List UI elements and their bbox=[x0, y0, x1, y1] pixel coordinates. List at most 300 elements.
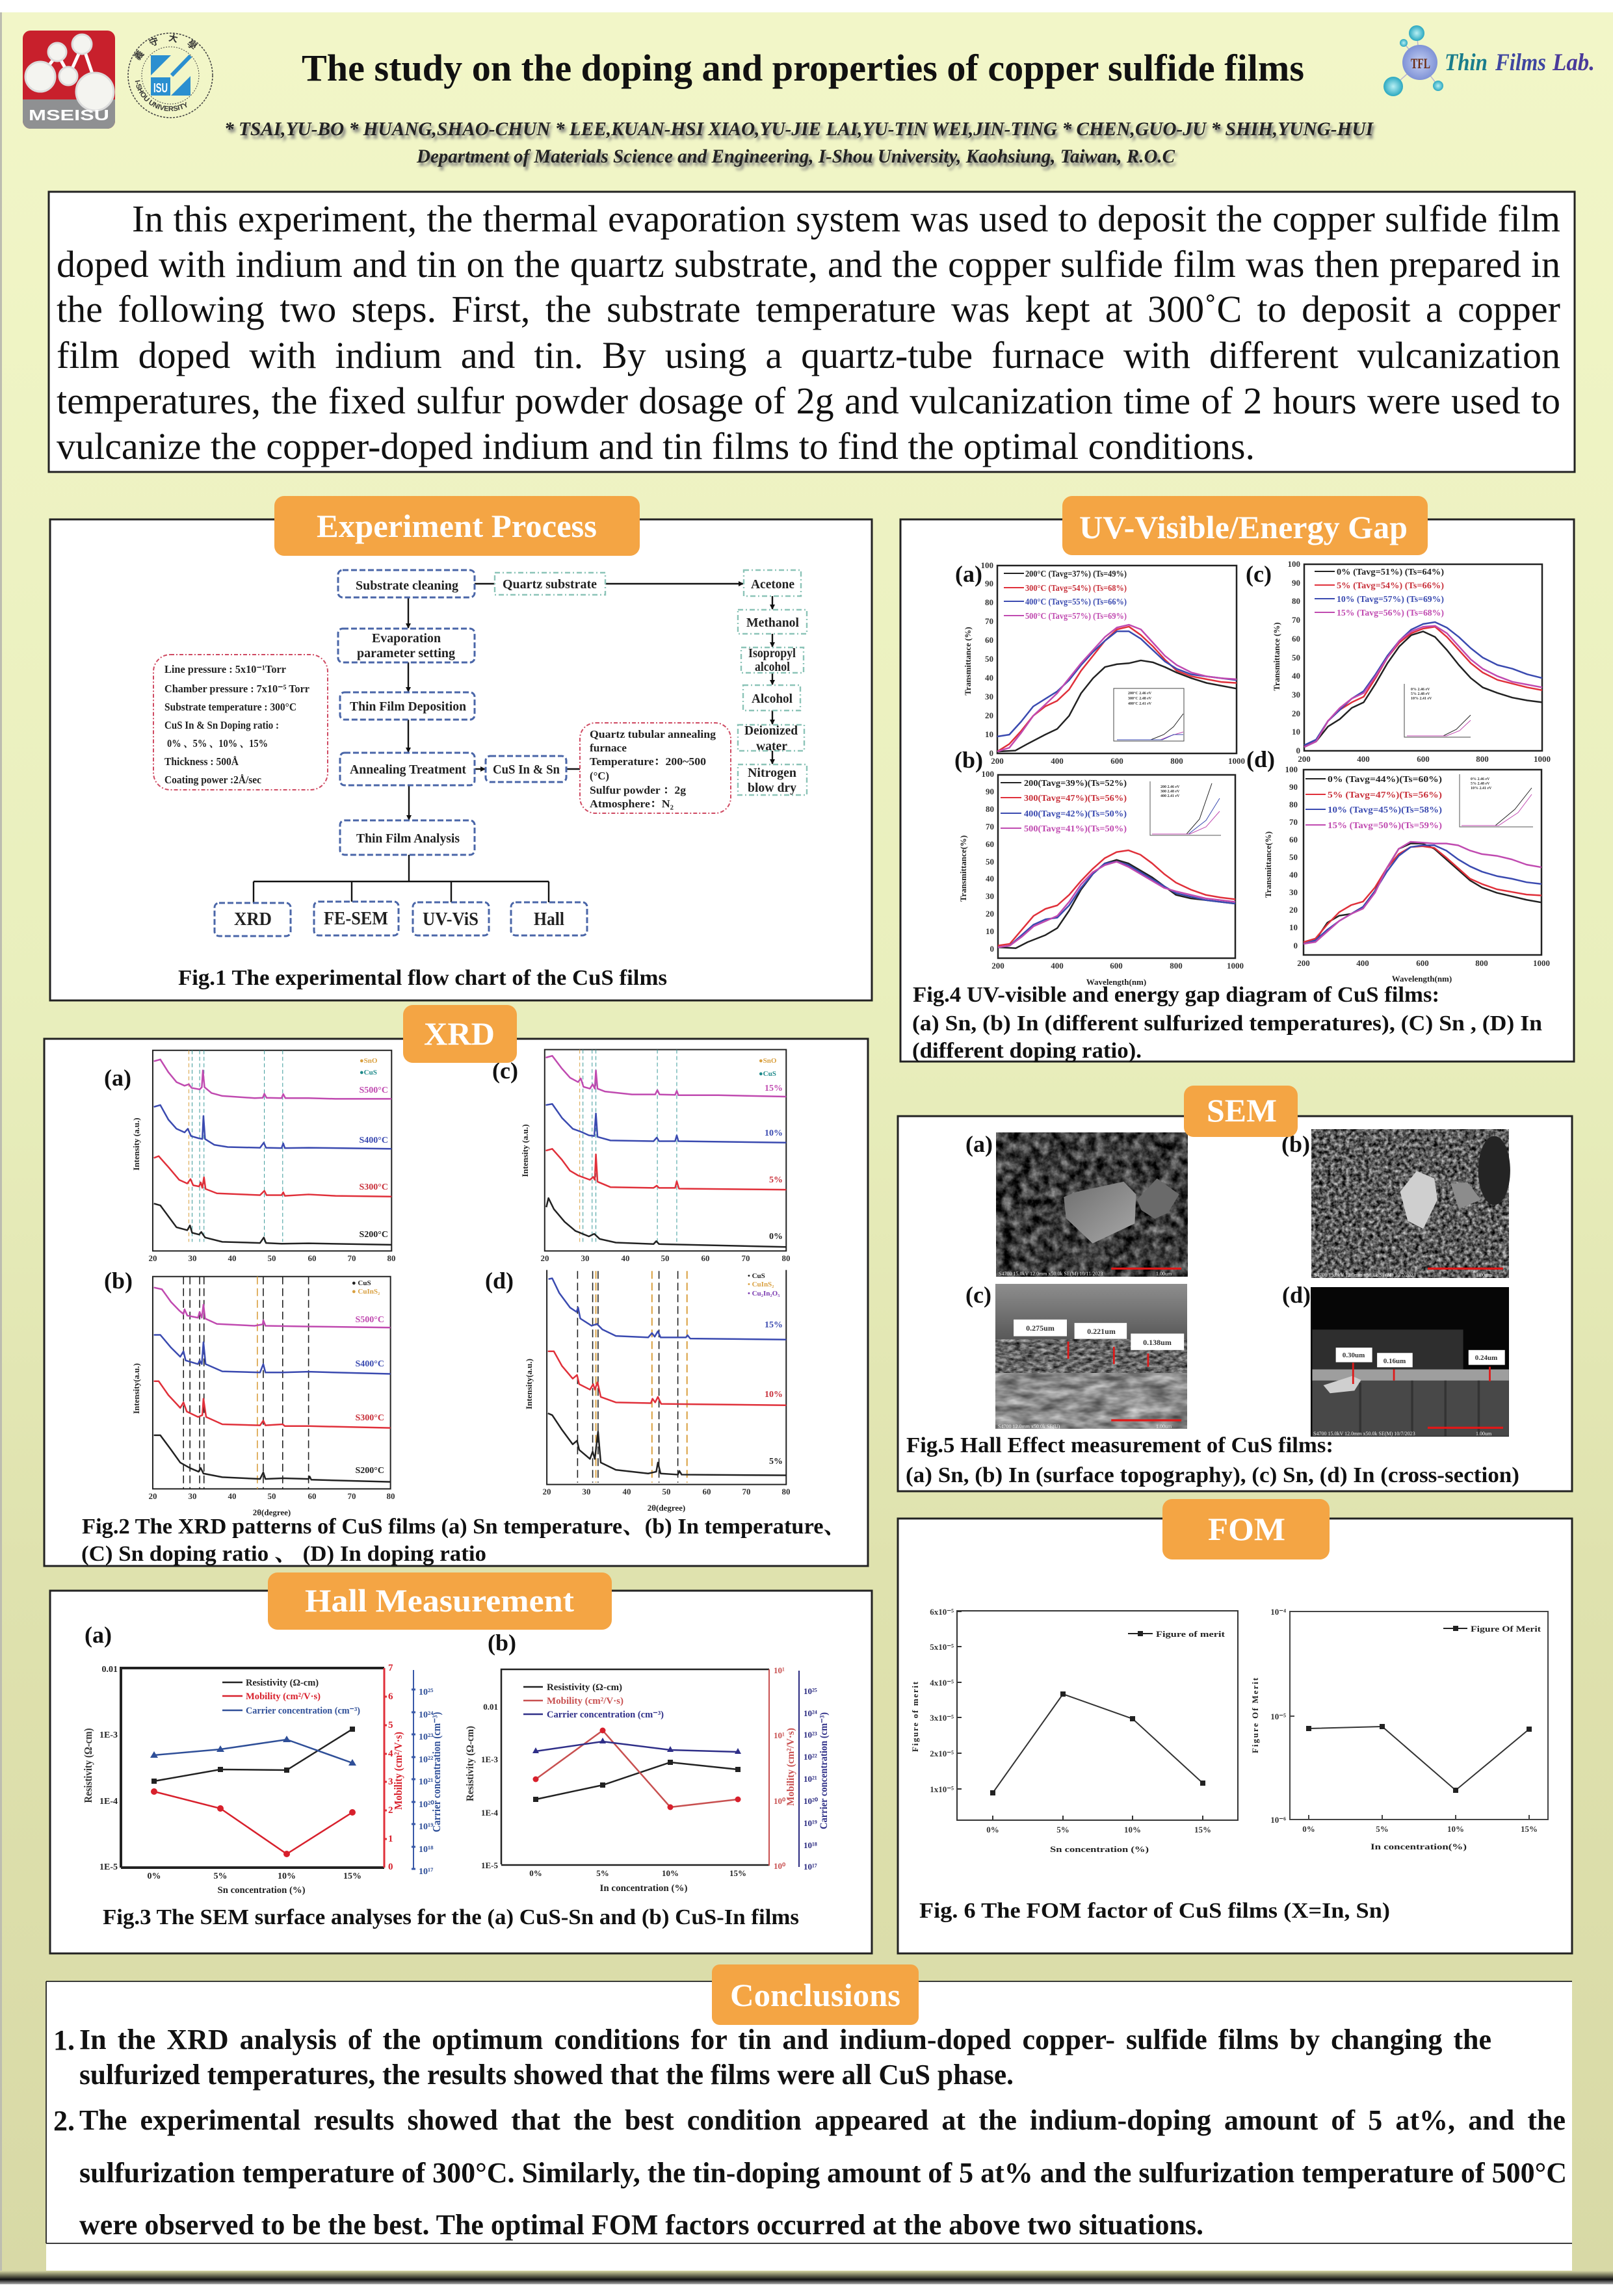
flow chart: Thin Film Deposition bbox=[350, 699, 466, 714]
chart: transmittance d: 40 bbox=[1289, 870, 1298, 880]
chart: hall b: 10¹⁹ bbox=[804, 1818, 817, 1828]
chart: transmittance d: 5% 2.48 eV bbox=[1471, 782, 1490, 786]
chart: transmittance a: 300°C 2.48 eV bbox=[1128, 696, 1152, 701]
flow chart: CuS In & Sn Doping ratio : bbox=[164, 719, 279, 731]
XRD sub-figure labels and axes: 20 bbox=[541, 1253, 549, 1263]
flow chart: Deionized bbox=[744, 724, 798, 738]
XRD sub-figure labels and axes: S300°C bbox=[359, 1182, 388, 1192]
panel: experiment process bbox=[50, 496, 872, 1000]
chart: FOM In: 10⁻⁵ bbox=[1270, 1712, 1286, 1721]
XRD sub-figure labels and axes: S500°C bbox=[355, 1315, 384, 1325]
chart: transmittance a: 30 bbox=[985, 692, 993, 701]
heading: experiment process: Experiment Process bbox=[317, 508, 597, 544]
XRD sub-figure labels and axes: 15% bbox=[765, 1084, 783, 1093]
chart: FOM In: Figure Of Merit bbox=[1250, 1677, 1260, 1753]
chart: FOM In: 10% bbox=[1447, 1824, 1464, 1834]
chart: hall b: 10¹ bbox=[774, 1665, 785, 1675]
flow chart: blow dry bbox=[748, 781, 796, 795]
XRD sub-figure labels and axes: 5% bbox=[769, 1175, 783, 1185]
chart: transmittance c: 600 bbox=[1417, 754, 1430, 764]
panel: hall measurement bbox=[50, 1572, 872, 1953]
logo: I-Shou University: ISU bbox=[153, 81, 168, 96]
flow chart: FE-SEM bbox=[324, 908, 388, 929]
chart: transmittance c: 200 bbox=[1298, 754, 1311, 764]
chart: transmittance d: 200 bbox=[1297, 958, 1310, 968]
chart: transmittance d: 70 bbox=[1289, 817, 1298, 827]
chart: transmittance b: 400(Tavg=42%)(Ts=50%) bbox=[1024, 809, 1127, 819]
panel: FOM bbox=[898, 1499, 1572, 1953]
XRD sub-figure labels and axes: 0% bbox=[769, 1232, 783, 1242]
logo: Thin Films Lab bbox=[1384, 25, 1595, 96]
chart: transmittance c: 800 bbox=[1476, 754, 1489, 764]
XRD sub-figure labels and axes: 70 bbox=[742, 1487, 750, 1496]
SEM image c: 0.138um bbox=[1143, 1338, 1172, 1347]
chart: transmittance d: 0 bbox=[1294, 941, 1298, 950]
XRD sub-figure labels and axes: 80 bbox=[386, 1491, 395, 1501]
heading: hall measurement bbox=[268, 1572, 612, 1630]
chart: hall b bbox=[465, 1630, 830, 1894]
caption: fig 5: Fig.5 Hall Effect measurement of CuS films: bbox=[906, 1433, 1333, 1457]
flow chart: Substrate cleaning bbox=[356, 579, 458, 593]
chart: hall b: 5% bbox=[596, 1868, 609, 1878]
chart: hall b: 0.01 bbox=[483, 1702, 498, 1712]
XRD sub-figure labels and axes: ●CuS bbox=[759, 1070, 776, 1078]
logo: I-Shou University: I-SHOU UNIVERSITY bbox=[135, 80, 187, 111]
logo: MSEISU: MSEISU bbox=[29, 107, 109, 124]
chart: transmittance c: 20 bbox=[1292, 709, 1300, 718]
logo: Thin Films Lab: Films bbox=[1495, 49, 1546, 76]
chart: transmittance c: 30 bbox=[1292, 690, 1300, 699]
chart: transmittance c: 5% (Tavg=54%) (Ts=66%) bbox=[1337, 581, 1444, 591]
chart: transmittance d: 60 bbox=[1289, 835, 1298, 844]
chart: hall a: Mobility (cm²/V·s) bbox=[246, 1691, 321, 1702]
flow chart bbox=[153, 570, 807, 936]
SEM image a: (a) bbox=[965, 1131, 993, 1157]
logo: Thin Films Lab: TFL bbox=[1411, 55, 1430, 72]
caption: fig 5 bbox=[906, 1433, 1519, 1487]
chart: transmittance b bbox=[954, 747, 1244, 987]
chart: FOM In: 10⁻⁶ bbox=[1270, 1815, 1286, 1825]
chart: FOM Sn: 10% bbox=[1124, 1825, 1141, 1834]
logo: Thin Films Lab: Lab. bbox=[1552, 49, 1595, 76]
XRD sub-figure labels and axes: 5% bbox=[769, 1457, 783, 1467]
chart: transmittance b: 90 bbox=[986, 787, 994, 796]
chart: transmittance d: 0% (Tavg=44%)(Ts=60%) bbox=[1328, 775, 1442, 785]
chart: FOM In: 0% bbox=[1302, 1824, 1315, 1834]
chart: hall b: 10²² bbox=[804, 1752, 817, 1762]
chart: transmittance b: 200 2.46 eV bbox=[1161, 785, 1180, 789]
chart: transmittance d: 50 bbox=[1289, 852, 1298, 862]
XRD sub-figure labels and axes: 70 bbox=[741, 1253, 750, 1263]
chart: transmittance c: 60 bbox=[1292, 634, 1300, 644]
XRD sub-figure labels and axes: 40 bbox=[228, 1491, 237, 1501]
chart: transmittance d: 30 bbox=[1289, 887, 1298, 897]
chart: hall a: 10²² bbox=[419, 1755, 433, 1765]
caption: fig 4: (different doping ratio). bbox=[912, 1039, 1142, 1063]
chart: transmittance c: 90 bbox=[1292, 578, 1300, 588]
XRD sub-figure labels and axes: • Cu₂In₂O₅ bbox=[748, 1290, 780, 1298]
chart: hall a: 10% bbox=[278, 1872, 296, 1881]
chart: transmittance b: 600 bbox=[1110, 961, 1123, 971]
XRD sub-figure labels and axes: ●SnO bbox=[360, 1057, 378, 1065]
XRD sub-figure labels and axes: Intensity(a.u.) bbox=[131, 1363, 141, 1414]
chart: FOM Sn: 5% bbox=[1056, 1825, 1069, 1834]
SEM image b bbox=[1281, 1129, 1510, 1278]
flow chart: Evaporation bbox=[372, 631, 441, 646]
chart: transmittance a: 300°C (Tavg=54%) (Ts=68%) bbox=[1025, 584, 1127, 594]
chart: hall a: 10¹⁹ bbox=[419, 1822, 433, 1832]
flow chart: Thin Film Analysis bbox=[356, 831, 460, 846]
chart: transmittance a: 100 bbox=[980, 560, 993, 570]
SEM image d bbox=[1282, 1282, 1509, 1437]
flow chart: Methanol bbox=[746, 616, 799, 630]
chart: transmittance c: 15% (Tavg=56%) (Ts=68%) bbox=[1337, 608, 1444, 618]
XRD sub-figure labels and axes: 70 bbox=[347, 1253, 356, 1263]
chart: transmittance c: 70 bbox=[1292, 615, 1300, 625]
chart: hall b: 10²⁴ bbox=[804, 1708, 817, 1718]
chart: hall a: 4 bbox=[388, 1749, 393, 1759]
chart: hall a: 3 bbox=[388, 1777, 393, 1787]
logo: MSEISU bbox=[23, 31, 115, 129]
chart: hall b: 10²⁰ bbox=[804, 1796, 819, 1806]
chart: hall a: 10¹⁷ bbox=[419, 1867, 433, 1877]
flow chart: 0% 、5% 、10% 、15% bbox=[167, 737, 268, 750]
chart: transmittance a: 10 bbox=[985, 729, 993, 739]
chart: transmittance a: 50 bbox=[985, 654, 993, 664]
conclusion 1: 1. bbox=[53, 2024, 75, 2056]
chart: transmittance b: 800 bbox=[1170, 961, 1183, 971]
chart: FOM In: Figure Of Merit bbox=[1471, 1624, 1541, 1634]
chart: transmittance a: 70 bbox=[985, 616, 993, 626]
chart: FOM Sn: 15% bbox=[1194, 1825, 1211, 1834]
chart: transmittance b: 60 bbox=[986, 839, 994, 849]
XRD sub-figure labels and axes: 50 bbox=[662, 1487, 671, 1496]
chart: transmittance a: 600 bbox=[1110, 756, 1123, 766]
chart: transmittance c: 400 bbox=[1357, 754, 1370, 764]
chart: transmittance a: 0 bbox=[990, 748, 993, 758]
chart: transmittance b: 300 2.48 eV bbox=[1161, 790, 1180, 794]
chart: hall b: Carrier concentration (cm⁻³) bbox=[547, 1710, 664, 1720]
chart: FOM Sn: Sn concentration (%) bbox=[1050, 1844, 1149, 1854]
XRD sub-figure labels and axes: 50 bbox=[661, 1253, 670, 1263]
chart: hall a: 15% bbox=[343, 1872, 361, 1881]
conclusion 2: sulfurization temperature of 300°C. Similarly, the tin-doping amount of 5 at% and the sulfurization temperature of 500°C bbox=[79, 2157, 1567, 2189]
heading: FOM bbox=[1162, 1499, 1330, 1559]
conclusion 1: sulfurized temperatures, the results showed that the films were all CuS phase. bbox=[79, 2059, 1014, 2091]
flow chart: Coating power :2Å/sec bbox=[164, 774, 261, 786]
chart: hall a: Resistivity (Ω-cm) bbox=[82, 1728, 94, 1803]
XRD sub-figure labels and axes: 10% bbox=[765, 1128, 783, 1138]
SEM image b: S4700 15.0kV 12.0mm x50.0k SE(M) 10/7/2023 bbox=[1314, 1272, 1416, 1278]
chart: hall a: Resistivity (Ω-cm) bbox=[246, 1678, 319, 1688]
chart: transmittance b: Transmittance(%) bbox=[958, 835, 968, 902]
heading: XRD bbox=[403, 1005, 517, 1063]
flow chart: UV-ViS bbox=[423, 909, 479, 930]
panel: XRD bbox=[44, 1005, 868, 1566]
chart: transmittance d: 100 bbox=[1285, 764, 1298, 774]
caption: fig 5: (a) Sn, (b) In (surface topography), (c) Sn, (d) In (cross-section) bbox=[906, 1463, 1519, 1487]
chart: hall a: 5% bbox=[213, 1872, 228, 1881]
chart: transmittance b: 500(Tavg=41%)(Ts=50%) bbox=[1024, 824, 1127, 834]
chart: hall a: 1 bbox=[388, 1834, 393, 1844]
SEM image c bbox=[965, 1282, 1187, 1429]
XRD sub-figure labels and axes: (d) bbox=[485, 1268, 514, 1294]
XRD sub-figure labels and axes: 10% bbox=[765, 1390, 783, 1400]
chart: hall b: 10¹⁸ bbox=[804, 1840, 817, 1850]
caption: fig 2: (C) Sn doping ratio 、 (D) In doping ratio bbox=[81, 1542, 486, 1566]
chart: hall b: Resistivity (Ω-cm) bbox=[547, 1682, 622, 1693]
chart: transmittance c: 1000 bbox=[1534, 754, 1551, 764]
chart: hall a: 10²⁵ bbox=[419, 1688, 433, 1697]
affiliation: Department of Materials Science and Engineering, I-Shou University, Kaohsiung, Taiwan, R.O.C bbox=[416, 146, 1175, 167]
panel: abstract: vulcanize the copper-doped indium and tin films to find the optimal conditions. bbox=[57, 425, 1255, 467]
XRD sub-figure labels and axes: ●CuS bbox=[360, 1069, 377, 1076]
caption: fig 4 bbox=[912, 983, 1542, 1063]
chart: transmittance c: 0 bbox=[1296, 746, 1300, 755]
XRD sub-figure labels and axes: 30 bbox=[189, 1253, 196, 1263]
XRD sub-figure labels and axes: 15% bbox=[765, 1320, 783, 1330]
XRD sub-figure labels and axes: • CuInS₂ bbox=[748, 1281, 774, 1288]
chart: transmittance c: 80 bbox=[1292, 596, 1300, 606]
XRD sub-figure labels and axes: 60 bbox=[308, 1253, 316, 1263]
caption: fig 1: Fig.1 The experimental flow chart of the CuS films bbox=[178, 966, 667, 990]
flow chart: Substrate temperature : 300°C bbox=[164, 701, 296, 713]
chart: FOM Sn: 2x10⁻⁵ bbox=[930, 1749, 954, 1758]
chart: hall a: Mobility (cm²/V·s) bbox=[392, 1732, 404, 1810]
chart: hall a: 0% bbox=[147, 1872, 161, 1881]
flow chart: Annealing Treatment bbox=[350, 763, 466, 777]
logo: I-Shou University bbox=[127, 33, 213, 118]
XRD sub-figure labels and axes: ●SnO bbox=[759, 1057, 777, 1065]
XRD sub-figure labels and axes: 70 bbox=[347, 1491, 356, 1501]
XRD sub-figure labels and axes: 30 bbox=[581, 1253, 589, 1263]
chart: hall a: (a) bbox=[85, 1622, 112, 1648]
XRD sub-figure labels and axes: S300°C bbox=[355, 1413, 384, 1423]
XRD sub-figure labels and axes: 60 bbox=[701, 1253, 710, 1263]
chart: hall a: 1E-5 bbox=[99, 1862, 118, 1872]
chart: hall b: 1E-4 bbox=[481, 1808, 498, 1818]
authors: * TSAI,YU-BO * HUANG,SHAO-CHUN * LEE,KUAN-HSI XIAO,YU-JIE LAI,YU-TIN WEI,JIN-TING * CHEN,GUO-JU * SHIH,YUNG-HUI bbox=[224, 118, 1374, 140]
chart: hall b: Mobility (cm²/V·s) bbox=[547, 1696, 623, 1706]
chart: FOM Sn: Figure of merit bbox=[910, 1681, 920, 1752]
chart: hall b: 0% bbox=[529, 1868, 542, 1878]
flow chart: Sulfur powder ：2g bbox=[590, 784, 687, 796]
chart: hall a: 2 bbox=[388, 1805, 393, 1816]
XRD sub-figure labels and axes: 50 bbox=[268, 1491, 276, 1501]
chart: transmittance a: 400 bbox=[1051, 756, 1064, 766]
chart: transmittance c: Transmittance (%) bbox=[1272, 622, 1281, 691]
chart: transmittance a: 40 bbox=[985, 673, 993, 683]
chart: FOM In bbox=[1250, 1607, 1548, 1851]
heading: hall measurement: Hall Measurement bbox=[305, 1582, 574, 1619]
chart: transmittance a: 1000 bbox=[1228, 756, 1245, 766]
chart: transmittance d: Transmittance(%) bbox=[1263, 831, 1273, 898]
flow chart: furnace bbox=[590, 742, 627, 754]
chart: transmittance d: 800 bbox=[1475, 958, 1488, 968]
caption: fig 4: (a) Sn, (b) In (different sulfurized temperatures), (C) Sn , (D) In bbox=[912, 1011, 1542, 1036]
chart: transmittance b: 0 bbox=[990, 944, 994, 954]
chart: FOM Sn: Figure of merit bbox=[1156, 1629, 1226, 1639]
chart: transmittance b: 40 bbox=[986, 874, 994, 883]
conclusion 2: were observed to be the best. The optimal FOM factors occurred at the above two situations. bbox=[79, 2209, 1203, 2241]
chart: transmittance a: 60 bbox=[985, 635, 993, 645]
XRD sub-figure labels and axes: Intensity(a.u.) bbox=[524, 1359, 534, 1409]
XRD sub-figure labels and axes: 20 bbox=[148, 1253, 157, 1263]
XRD sub-figure labels and axes: Intensity (a.u.) bbox=[520, 1124, 530, 1177]
heading: SEM: SEM bbox=[1207, 1092, 1277, 1128]
chart: transmittance a: 800 bbox=[1170, 756, 1183, 766]
XRD sub-figure labels and axes: 2θ(degree) bbox=[253, 1507, 291, 1517]
chart: hall b: 10% bbox=[662, 1868, 679, 1878]
SEM image a: S4700 15.0kV 12.0mm x50.0k SE(M) 10/11/2023 bbox=[999, 1271, 1103, 1277]
conclusion 1 bbox=[53, 2024, 1491, 2091]
chart: transmittance b: 80 bbox=[986, 804, 994, 814]
chart: hall a: 6 bbox=[388, 1691, 393, 1702]
chart: hall a: Carrier concentration (cm⁻³) bbox=[430, 1712, 443, 1832]
chart: FOM In: 15% bbox=[1521, 1824, 1538, 1834]
chart: hall b: 10¹⁷ bbox=[804, 1862, 817, 1872]
logo: I-Shou University: 義守大學 bbox=[134, 34, 198, 60]
chart: transmittance b: 200 bbox=[991, 961, 1004, 971]
caption: fig 2 bbox=[81, 1515, 846, 1566]
chart: transmittance a: 90 bbox=[985, 579, 993, 588]
XRD sub-figure labels and axes: 30 bbox=[583, 1487, 590, 1496]
chart: transmittance a: 200°C 2.46 eV bbox=[1128, 691, 1152, 696]
conclusion 2: 2. bbox=[53, 2105, 75, 2137]
XRD sub-figure labels and axes: (b) bbox=[104, 1268, 133, 1294]
chart: transmittance a bbox=[955, 560, 1245, 766]
SEM image c: 1.00um bbox=[1156, 1424, 1172, 1429]
SEM image b: (b) bbox=[1281, 1131, 1310, 1157]
heading: experiment process bbox=[274, 496, 640, 556]
chart: transmittance d: 0% 2.46 eV bbox=[1471, 777, 1490, 781]
flow chart: Chamber pressure : 7x10⁻⁵ Torr bbox=[164, 683, 309, 695]
chart: hall b: (b) bbox=[488, 1630, 516, 1656]
flow chart: Isopropyl bbox=[748, 646, 796, 660]
chart: transmittance b: 1000 bbox=[1227, 961, 1244, 971]
chart: hall a: Carrier concentration (cm⁻³) bbox=[246, 1706, 360, 1716]
chart: transmittance c: 0% 2.46 eV bbox=[1411, 688, 1430, 692]
SEM image d: (d) bbox=[1282, 1282, 1311, 1308]
heading: UV-visible: UV-Visible/Energy Gap bbox=[1079, 509, 1408, 545]
chart: transmittance d: 600 bbox=[1416, 958, 1429, 968]
SEM image d: 0.30um bbox=[1343, 1351, 1365, 1359]
flow chart: Alcohol bbox=[752, 692, 793, 706]
chart: hall b: Carrier concentration (cm⁻³) bbox=[819, 1712, 830, 1829]
SEM image d: 0.24um bbox=[1475, 1354, 1497, 1362]
chart: transmittance b: 400 2.41 eV bbox=[1161, 794, 1180, 798]
chart: transmittance b: 400 bbox=[1051, 961, 1064, 971]
flow chart: parameter setting bbox=[357, 646, 455, 660]
chart: transmittance a: 400°C 2.41 eV bbox=[1128, 701, 1152, 706]
chart: transmittance b: 100 bbox=[982, 769, 994, 779]
chart: transmittance d: (d) bbox=[1246, 746, 1275, 772]
chart: transmittance d: 10% 2.41 eV bbox=[1471, 787, 1492, 790]
chart: hall a: 10²¹ bbox=[419, 1777, 433, 1787]
SEM image c: 0.275um bbox=[1026, 1324, 1055, 1333]
SEM image a: 1.00um bbox=[1156, 1271, 1172, 1277]
panel: UV-visible / energy gap bbox=[900, 496, 1574, 1063]
flow chart: Quartz substrate bbox=[503, 577, 597, 592]
XRD patterns bbox=[153, 1050, 786, 1489]
chart: hall a: Sn concentration (%) bbox=[217, 1885, 306, 1896]
chart: transmittance d: 80 bbox=[1289, 800, 1298, 809]
XRD sub-figure labels and axes: S500°C bbox=[359, 1086, 388, 1095]
chart: hall b: 1E-3 bbox=[481, 1755, 498, 1764]
chart: hall a: 1E-3 bbox=[99, 1730, 118, 1740]
chart: FOM Sn bbox=[910, 1607, 1238, 1854]
chart: transmittance d: 5% (Tavg=47%)(Ts=56%) bbox=[1328, 790, 1442, 800]
chart: transmittance c: (c) bbox=[1246, 561, 1272, 587]
chart: hall b: Resistivity (Ω-cm) bbox=[465, 1726, 476, 1801]
SEM image d: S4700 15.0kV 12.0mm x50.0k SE(M) 10/7/2023 bbox=[1313, 1431, 1415, 1437]
XRD sub-figure labels and axes: 80 bbox=[781, 1253, 791, 1263]
XRD sub-figure labels and axes: • CuS bbox=[748, 1272, 765, 1280]
flow chart: Thickness : 500Å bbox=[164, 755, 239, 768]
SEM image c: 0.221um bbox=[1087, 1327, 1116, 1336]
chart: hall a bbox=[82, 1622, 443, 1896]
chart: FOM Sn: 6x10⁻⁵ bbox=[930, 1607, 954, 1617]
flow chart: alcohol bbox=[755, 660, 790, 674]
panel: conclusions bbox=[46, 1964, 1572, 2271]
chart: hall b: 1E-5 bbox=[481, 1860, 498, 1870]
chart: transmittance a: 20 bbox=[985, 711, 993, 720]
SEM image c: S4700 12.0mm x50.0k SE(U) bbox=[998, 1424, 1060, 1429]
chart: hall b: In concentration (%) bbox=[599, 1883, 688, 1894]
heading: SEM bbox=[1184, 1086, 1298, 1137]
chart: transmittance a: (a) bbox=[955, 561, 982, 587]
XRD sub-figure labels and axes: 50 bbox=[268, 1253, 276, 1263]
chart: transmittance a: 200 bbox=[991, 756, 1004, 766]
XRD sub-figure labels and axes: 20 bbox=[148, 1491, 157, 1501]
SEM image d: 1.00um bbox=[1476, 1431, 1492, 1437]
flow chart: Line pressure : 5x10⁻¹Torr bbox=[164, 663, 286, 675]
chart: FOM Sn: 1x10⁻⁵ bbox=[930, 1784, 954, 1794]
XRD sub-figure labels and axes: 40 bbox=[622, 1253, 629, 1263]
XRD sub-figure labels and axes: S400°C bbox=[355, 1359, 384, 1369]
XRD sub-figure labels and axes: 60 bbox=[308, 1491, 316, 1501]
heading: conclusions: Conclusions bbox=[730, 1977, 900, 2013]
chart: transmittance a: 400°C (Tavg=55%) (Ts=66%) bbox=[1025, 597, 1127, 607]
XRD sub-figure labels and axes: 80 bbox=[387, 1253, 395, 1263]
XRD sub-figure labels and axes: S400°C bbox=[359, 1136, 388, 1145]
XRD sub-figure labels and axes: 20 bbox=[542, 1487, 551, 1496]
chart: transmittance c bbox=[1246, 559, 1551, 764]
chart: transmittance d: 90 bbox=[1289, 782, 1298, 792]
chart: FOM In: 10⁻⁴ bbox=[1270, 1607, 1286, 1617]
chart: hall a: 5 bbox=[388, 1720, 393, 1730]
SEM image a bbox=[965, 1131, 1188, 1277]
chart: transmittance a: 500°C (Tavg=57%) (Ts=69%) bbox=[1025, 612, 1127, 621]
flow chart: Hall bbox=[534, 909, 564, 930]
chart: transmittance b: 300(Tavg=47%)(Ts=56%) bbox=[1024, 794, 1127, 803]
XRD sub-figure labels and axes: 60 bbox=[702, 1487, 711, 1496]
chart: hall a: 1E-4 bbox=[99, 1797, 118, 1807]
chart: transmittance d: 20 bbox=[1289, 905, 1298, 915]
chart: hall b: 10²⁵ bbox=[804, 1686, 817, 1696]
XRD sub-figure labels and axes: 2θ(degree) bbox=[648, 1503, 685, 1513]
heading: FOM: FOM bbox=[1208, 1511, 1285, 1547]
XRD sub-figure labels and axes: ● CuInS₂ bbox=[352, 1288, 380, 1296]
chart: transmittance b: Wavelength(nm) bbox=[1086, 977, 1146, 987]
caption: fig 3: Fig.3 The SEM surface analyses for the (a) CuS-Sn and (b) CuS-In films bbox=[103, 1905, 799, 1929]
SEM image d: 0.16um bbox=[1384, 1357, 1406, 1365]
title: The study on the doping and properties of copper sulfide films bbox=[302, 47, 1304, 89]
flow chart: Temperature：200~500 bbox=[590, 755, 706, 768]
chart: hall b: 15% bbox=[729, 1868, 746, 1878]
flow chart: Nitrogen bbox=[748, 766, 796, 780]
XRD sub-figure labels and axes bbox=[104, 1057, 791, 1517]
